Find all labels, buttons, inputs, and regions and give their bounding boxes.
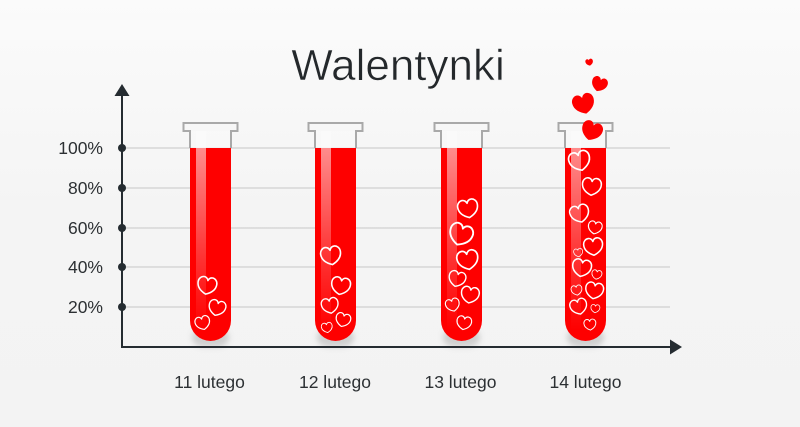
x axis labels — [174, 372, 622, 392]
x axis labels: 13 lutego — [424, 372, 497, 392]
y axis labels: 100% — [58, 138, 103, 158]
tube: 14 lutego — [558, 123, 612, 347]
tube: 13 lutego — [434, 123, 488, 347]
tube: 12 lutego — [308, 123, 362, 347]
x axis labels: 12 lutego — [299, 372, 371, 392]
y axis labels — [58, 138, 103, 317]
y axis labels: 80% — [68, 178, 103, 198]
x axis labels: 11 lutego — [174, 372, 245, 392]
tube: 11 lutego — [184, 123, 238, 347]
x axis with arrow — [121, 340, 682, 354]
y axis with arrow — [114, 84, 130, 348]
y axis labels: 60% — [68, 218, 103, 238]
title: Walentynki — [291, 41, 505, 90]
x axis labels: 14 lutego — [549, 372, 622, 392]
icon: red hearts rising from tube — [570, 58, 609, 144]
y axis labels: 40% — [68, 257, 103, 277]
y axis labels: 20% — [68, 297, 103, 317]
chart grid lines — [122, 148, 670, 307]
